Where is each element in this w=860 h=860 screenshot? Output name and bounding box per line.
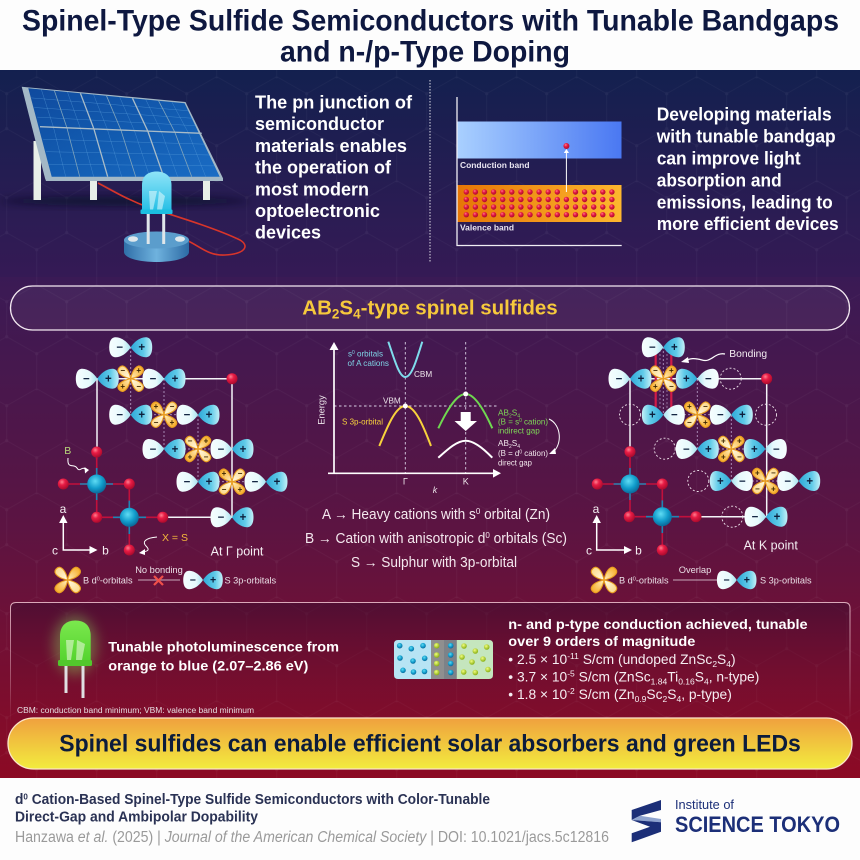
logo mark [632, 800, 661, 842]
text: conductivity [508, 616, 808, 704]
panel: orbitals at gamma point [52, 337, 288, 594]
conduction band [458, 122, 622, 158]
legend: overlap: − [723, 574, 730, 586]
text: conductivity: • 1.8 × 10 [508, 687, 567, 702]
curve labels: 4 [517, 444, 520, 450]
B d0 orbitals: + [721, 452, 726, 462]
valence band [458, 185, 622, 222]
curve labels: Γ [403, 476, 408, 486]
B d0 orbitals: − [755, 484, 760, 494]
B d0 orbitals: − [703, 402, 708, 411]
axes: c [52, 544, 58, 558]
B d0 orbitals: − [771, 468, 776, 478]
axes [586, 502, 642, 558]
text: pn junction: The pn junction of [255, 92, 413, 112]
S 3p orbitals: − [218, 512, 225, 524]
legend: no bonding: − [190, 574, 196, 586]
S 3p orbitals: + [206, 477, 213, 489]
text: conductivity: 4 [676, 694, 681, 704]
curve labels: orbitals [355, 350, 383, 358]
text: conductivity: 0.16 [678, 676, 695, 686]
legend: no bonding [53, 565, 276, 594]
lattice lines [630, 379, 767, 517]
B d0 orbitals [649, 364, 780, 495]
footnote: CBM: conduction band minimum; VBM: valence band minimum [17, 706, 254, 715]
wire [98, 183, 245, 255]
curve labels: S 3p-orbital [342, 418, 383, 426]
legend: no bonding: + [210, 574, 216, 586]
text: tunable bandgap: absorption and [657, 170, 782, 190]
arrow: shift down [454, 412, 477, 431]
curve labels: 2 [509, 414, 512, 420]
S 3p orbitals: + [739, 410, 746, 422]
S 3p orbitals [76, 337, 288, 527]
text: conductivity: over 9 orders of magnitude [508, 633, 696, 649]
icon: solar panel [22, 87, 223, 200]
curve labels: AB [498, 408, 509, 418]
text: tunable bandgap: Developing materials [657, 104, 832, 124]
curve labels: direct gap [498, 458, 532, 468]
atoms [592, 373, 772, 556]
chart: band structure E-k diagram [316, 342, 559, 495]
text: conductivity: S/cm (Zn [575, 687, 635, 702]
S 3p orbitals: + [806, 476, 813, 488]
heading pill: AB2S4-type spinel sulfides: 2 [332, 306, 339, 322]
S 3p orbitals: + [105, 374, 112, 386]
B d0 orbitals: + [170, 418, 175, 427]
text: conductivity: S/cm (ZnSc [575, 670, 651, 684]
S 3p orbitals: − [150, 374, 157, 386]
text: conductivity: S [717, 652, 726, 667]
B d0 orbitals: − [188, 436, 193, 446]
band labels: Conduction band [460, 160, 530, 170]
icon: doped semiconductor junction [394, 640, 493, 679]
band labels [460, 160, 530, 233]
S 3p orbitals: + [138, 342, 145, 354]
B d0 orbitals: + [238, 485, 243, 494]
dashed guides [334, 342, 497, 473]
text: conductivity: , p-type) [681, 687, 732, 702]
legend: no bonding: 0 [97, 576, 100, 582]
curve labels: cation) [522, 449, 548, 458]
B d0 orbitals: + [653, 382, 658, 391]
footer citation: 0 [23, 792, 28, 802]
logo: Institute of Science Tokyo [632, 798, 840, 842]
curve labels: S [512, 408, 518, 418]
S 3p orbitals: − [616, 374, 623, 386]
B d0 orbitals: + [721, 436, 726, 446]
heading pill: AB2S4-type spinel sulfides: -type spinel sulfides [361, 296, 558, 320]
S 3p orbitals: + [172, 444, 179, 456]
curve labels: 4 [517, 414, 520, 420]
text: pn junction: materials enables [255, 135, 407, 156]
curve labels: 0 [519, 450, 522, 456]
S 3p orbitals: + [138, 410, 145, 422]
curve: CBM [388, 342, 422, 377]
text: pn junction: optoelectronic [255, 200, 380, 221]
curve labels [342, 350, 548, 495]
band diagram [457, 97, 622, 246]
axes: b [102, 544, 109, 558]
S 3p orbitals: − [773, 444, 780, 456]
panel: results box [10, 602, 850, 722]
S 3p orbitals: − [739, 476, 746, 488]
curve: S 3p [379, 406, 431, 446]
text: pn junction: the operation of [255, 157, 392, 178]
S 3p orbitals: − [705, 374, 712, 386]
dashed guides [131, 347, 250, 482]
curve labels: cation) [522, 418, 548, 426]
footer citation: Cation-Based Spinel-Type Sulfide Semiconductors with Color-Tunable [28, 792, 490, 808]
legend: overlap: + [744, 574, 750, 586]
text: conductivity: -5 [567, 668, 575, 678]
icon: green LED [53, 615, 97, 698]
text: conductivity: 1.84 [651, 676, 667, 686]
B d0 orbitals: + [771, 484, 776, 494]
B d0 orbitals: + [737, 436, 742, 446]
chart: band structure E-k diagram: Energy [316, 395, 326, 425]
text: conductivity: Sc [646, 687, 663, 702]
S 3p orbitals: + [638, 374, 645, 386]
S 3p orbitals: − [752, 512, 759, 524]
legend: no bonding: -orbitals [100, 575, 133, 585]
B d0 orbitals: + [204, 436, 209, 446]
text: pn junction: most modern [255, 178, 369, 199]
S 3p orbitals: − [184, 477, 191, 489]
text: conductivity: 4 [726, 659, 731, 669]
text: conductivity: • 3.7 × 10 [508, 670, 567, 684]
S 3p orbitals: − [116, 410, 123, 422]
text: tunable bandgap: with tunable bandgap [656, 126, 836, 146]
text: conductivity: 2 [712, 659, 717, 669]
arrow: curved [549, 419, 559, 454]
B d0 orbitals: − [170, 402, 175, 411]
S 3p orbitals: + [274, 477, 281, 489]
text: conductivity: n- and p-type conduction achieved, tunable [508, 616, 808, 632]
text: conductivity: 4 [704, 676, 709, 686]
label: X = S: X = S [162, 532, 188, 544]
curve labels: s [348, 350, 352, 358]
B d0 orbitals: + [222, 469, 227, 478]
B d0 orbitals: + [669, 366, 674, 375]
axes: a [593, 502, 600, 516]
legend: overlap: B d [619, 575, 633, 585]
text: pn junction [255, 92, 413, 243]
S 3p orbitals: − [717, 410, 724, 422]
legend: no bonding: S 3p-orbitals [224, 575, 276, 585]
S 3p orbitals: + [705, 444, 712, 456]
S 3p orbitals: − [83, 374, 90, 386]
B d0 orbitals: + [687, 402, 692, 411]
S 3p orbitals: + [240, 512, 247, 524]
label: X = S [139, 532, 188, 555]
label: At gamma point: At Γ point [211, 544, 264, 558]
S 3p orbitals: + [751, 444, 758, 456]
illustration: solar panel with LED [0, 87, 250, 262]
curve labels: K [463, 476, 469, 486]
logo: Institute of Science Tokyo: Institute of [675, 798, 735, 812]
footer citation: d [15, 792, 24, 808]
icon: blue LED [140, 172, 172, 244]
text: photoluminescence: orange to blue (2.07–2.86 eV) [108, 658, 308, 674]
title: Spinel-Type Sulfide Semiconductors with Tunable Bandgaps [22, 4, 839, 38]
empty orbital sites [620, 368, 776, 527]
B d0 orbitals: − [136, 382, 141, 391]
text: conductivity: , n-type) [709, 670, 759, 684]
B d0 orbitals: − [687, 418, 692, 427]
icon: LED base [124, 232, 189, 262]
curve labels: CBM [414, 370, 432, 379]
S 3p orbitals: + [206, 410, 213, 422]
curve labels: 2 [509, 444, 512, 450]
S 3p orbitals: − [784, 476, 791, 488]
B d0 orbitals [116, 364, 246, 496]
B d0 orbitals: − [204, 452, 209, 462]
text: tunable bandgap: more efficient devices [657, 213, 839, 234]
curve labels: k [433, 485, 438, 495]
text: cation roles [305, 506, 567, 571]
band labels: Valence band [460, 223, 514, 233]
B d0 orbitals: + [755, 468, 760, 478]
text: cation roles: orbital (Zn) [480, 507, 550, 523]
S 3p orbitals: − [116, 342, 123, 354]
footer citation: Direct-Gap and Ambipolar Dopability [15, 810, 258, 826]
S 3p orbitals: − [252, 477, 259, 489]
title [22, 4, 839, 68]
B d0 orbitals: − [653, 366, 658, 375]
text: cation roles: S → Sulphur with 3p-orbital [351, 555, 517, 571]
logo: Institute of Science Tokyo: SCIENCE TOKYO [675, 812, 840, 837]
heading pill: AB2S4-type spinel sulfides [10, 286, 850, 330]
S 3p orbitals: − [671, 410, 678, 422]
curve labels: (B = d [498, 449, 520, 458]
legend: overlap: Overlap [679, 565, 711, 575]
bonds [63, 452, 163, 550]
axes: c [586, 544, 592, 558]
B d0 orbitals: + [154, 402, 159, 411]
B d0 orbitals: − [238, 469, 243, 478]
label: At K point: At K point [744, 538, 798, 552]
S 3p orbitals: + [649, 410, 656, 422]
legend: overlap: -orbitals [636, 575, 669, 585]
text: cation roles: 0 [476, 506, 481, 516]
text: conductivity: -2 [567, 686, 575, 696]
axes [328, 342, 501, 478]
conclusion banner: Spinel sulfides can enable efficient solar absorbers and green LEDs [59, 730, 801, 758]
legend: overlap [590, 565, 812, 594]
footer citation [15, 792, 609, 846]
S 3p orbitals: + [717, 476, 724, 488]
legend: no bonding: B d [83, 575, 97, 585]
curve: s0 cation [438, 394, 492, 428]
B d0 orbitals: − [154, 418, 159, 427]
S 3p orbitals: − [150, 444, 157, 456]
text: conductivity: 2 [663, 694, 668, 704]
label: B: B [64, 445, 71, 457]
text: conductivity: S [695, 670, 704, 684]
legend: no bonding: No bonding [135, 565, 183, 575]
text: tunable bandgap: can improve light [657, 148, 801, 168]
S 3p orbitals: − [218, 444, 225, 456]
heading pill: AB2S4-type spinel sulfides: S [339, 296, 353, 320]
excitation arrow [563, 143, 569, 192]
text: cation roles: 0 [485, 530, 490, 540]
label: B [64, 445, 89, 474]
text: pn junction: devices [255, 222, 321, 243]
S 3p orbitals: − [649, 342, 656, 354]
heading pill: AB2S4-type spinel sulfides: 4 [353, 306, 361, 322]
text: conductivity: 0.9 [635, 694, 647, 704]
panel: orbitals at K point [586, 337, 820, 594]
curve labels: 0 [352, 350, 355, 356]
S 3p orbitals: + [774, 512, 781, 524]
S 3p orbitals: + [671, 342, 678, 354]
footer citation: Hanzawa et al. (2025) | Journal of the American Chemical Society | DOI: 10.1021/jacs.5c12816 [15, 829, 609, 846]
dashed guides [663, 347, 783, 481]
B d0 orbitals: − [669, 382, 674, 391]
label: Bonding: Bonding [729, 349, 767, 360]
text: tunable bandgap: emissions, leading to [657, 191, 833, 212]
heading pill: AB2S4-type spinel sulfides: AB [302, 296, 332, 320]
curve labels: AB [498, 439, 509, 448]
curve labels: of A cations [348, 359, 389, 368]
text: cation roles: orbitals (Sc) [490, 531, 567, 547]
curve labels: VBM [383, 396, 401, 406]
atoms [58, 373, 237, 556]
text: cation roles: B → Cation with anisotropic d [305, 531, 495, 547]
axes [52, 502, 109, 558]
text: tunable bandgap [656, 104, 839, 234]
text: cation roles: A → Heavy cations with s [322, 507, 486, 523]
ground shadow [0, 196, 250, 206]
text: conductivity: • 2.5 × 10 [508, 652, 567, 667]
legend: overlap: S 3p-orbitals [760, 575, 812, 585]
S 3p orbitals: − [184, 410, 191, 422]
label: Bonding [681, 349, 767, 363]
B d0 orbitals: − [222, 485, 227, 494]
text: pn junction: semiconductor [255, 113, 384, 134]
electrons [464, 189, 615, 217]
B d0 orbitals: + [703, 418, 708, 427]
B d0 orbitals: + [136, 366, 141, 375]
title: and n-/p-Type Doping [280, 36, 570, 68]
axes [457, 97, 622, 246]
axes: b [635, 544, 642, 558]
S 3p orbitals: − [683, 444, 690, 456]
lattice lines [97, 379, 232, 517]
text: conductivity: ) [731, 652, 736, 667]
curve labels: 0 [519, 418, 522, 424]
bonds [597, 452, 696, 550]
B d0 orbitals: + [120, 382, 125, 391]
legend: overlap: 0 [633, 576, 636, 582]
text: conductivity: Ti [667, 670, 678, 684]
B d0 orbitals: − [120, 366, 125, 375]
axes: a [60, 502, 67, 516]
conclusion banner [8, 718, 852, 769]
text: conductivity: S [667, 687, 676, 702]
curve labels: (B = s [498, 418, 520, 426]
curve labels: S [512, 439, 518, 448]
S 3p orbitals [608, 337, 820, 527]
text: conductivity: S/cm (undoped ZnSc [579, 652, 712, 667]
S 3p orbitals: + [240, 444, 247, 456]
S 3p orbitals: + [683, 374, 690, 386]
text: photoluminescence [108, 638, 339, 674]
S 3p orbitals: + [172, 374, 179, 386]
text: conductivity: -11 [567, 651, 579, 661]
curve: d0 cation [438, 441, 492, 458]
B d0 orbitals: + [188, 452, 193, 462]
bonding bars [656, 354, 671, 408]
text: photoluminescence: Tunable photoluminescence from [108, 638, 339, 654]
B d0 orbitals: − [737, 452, 742, 462]
curve labels: indirect gap [498, 426, 540, 436]
